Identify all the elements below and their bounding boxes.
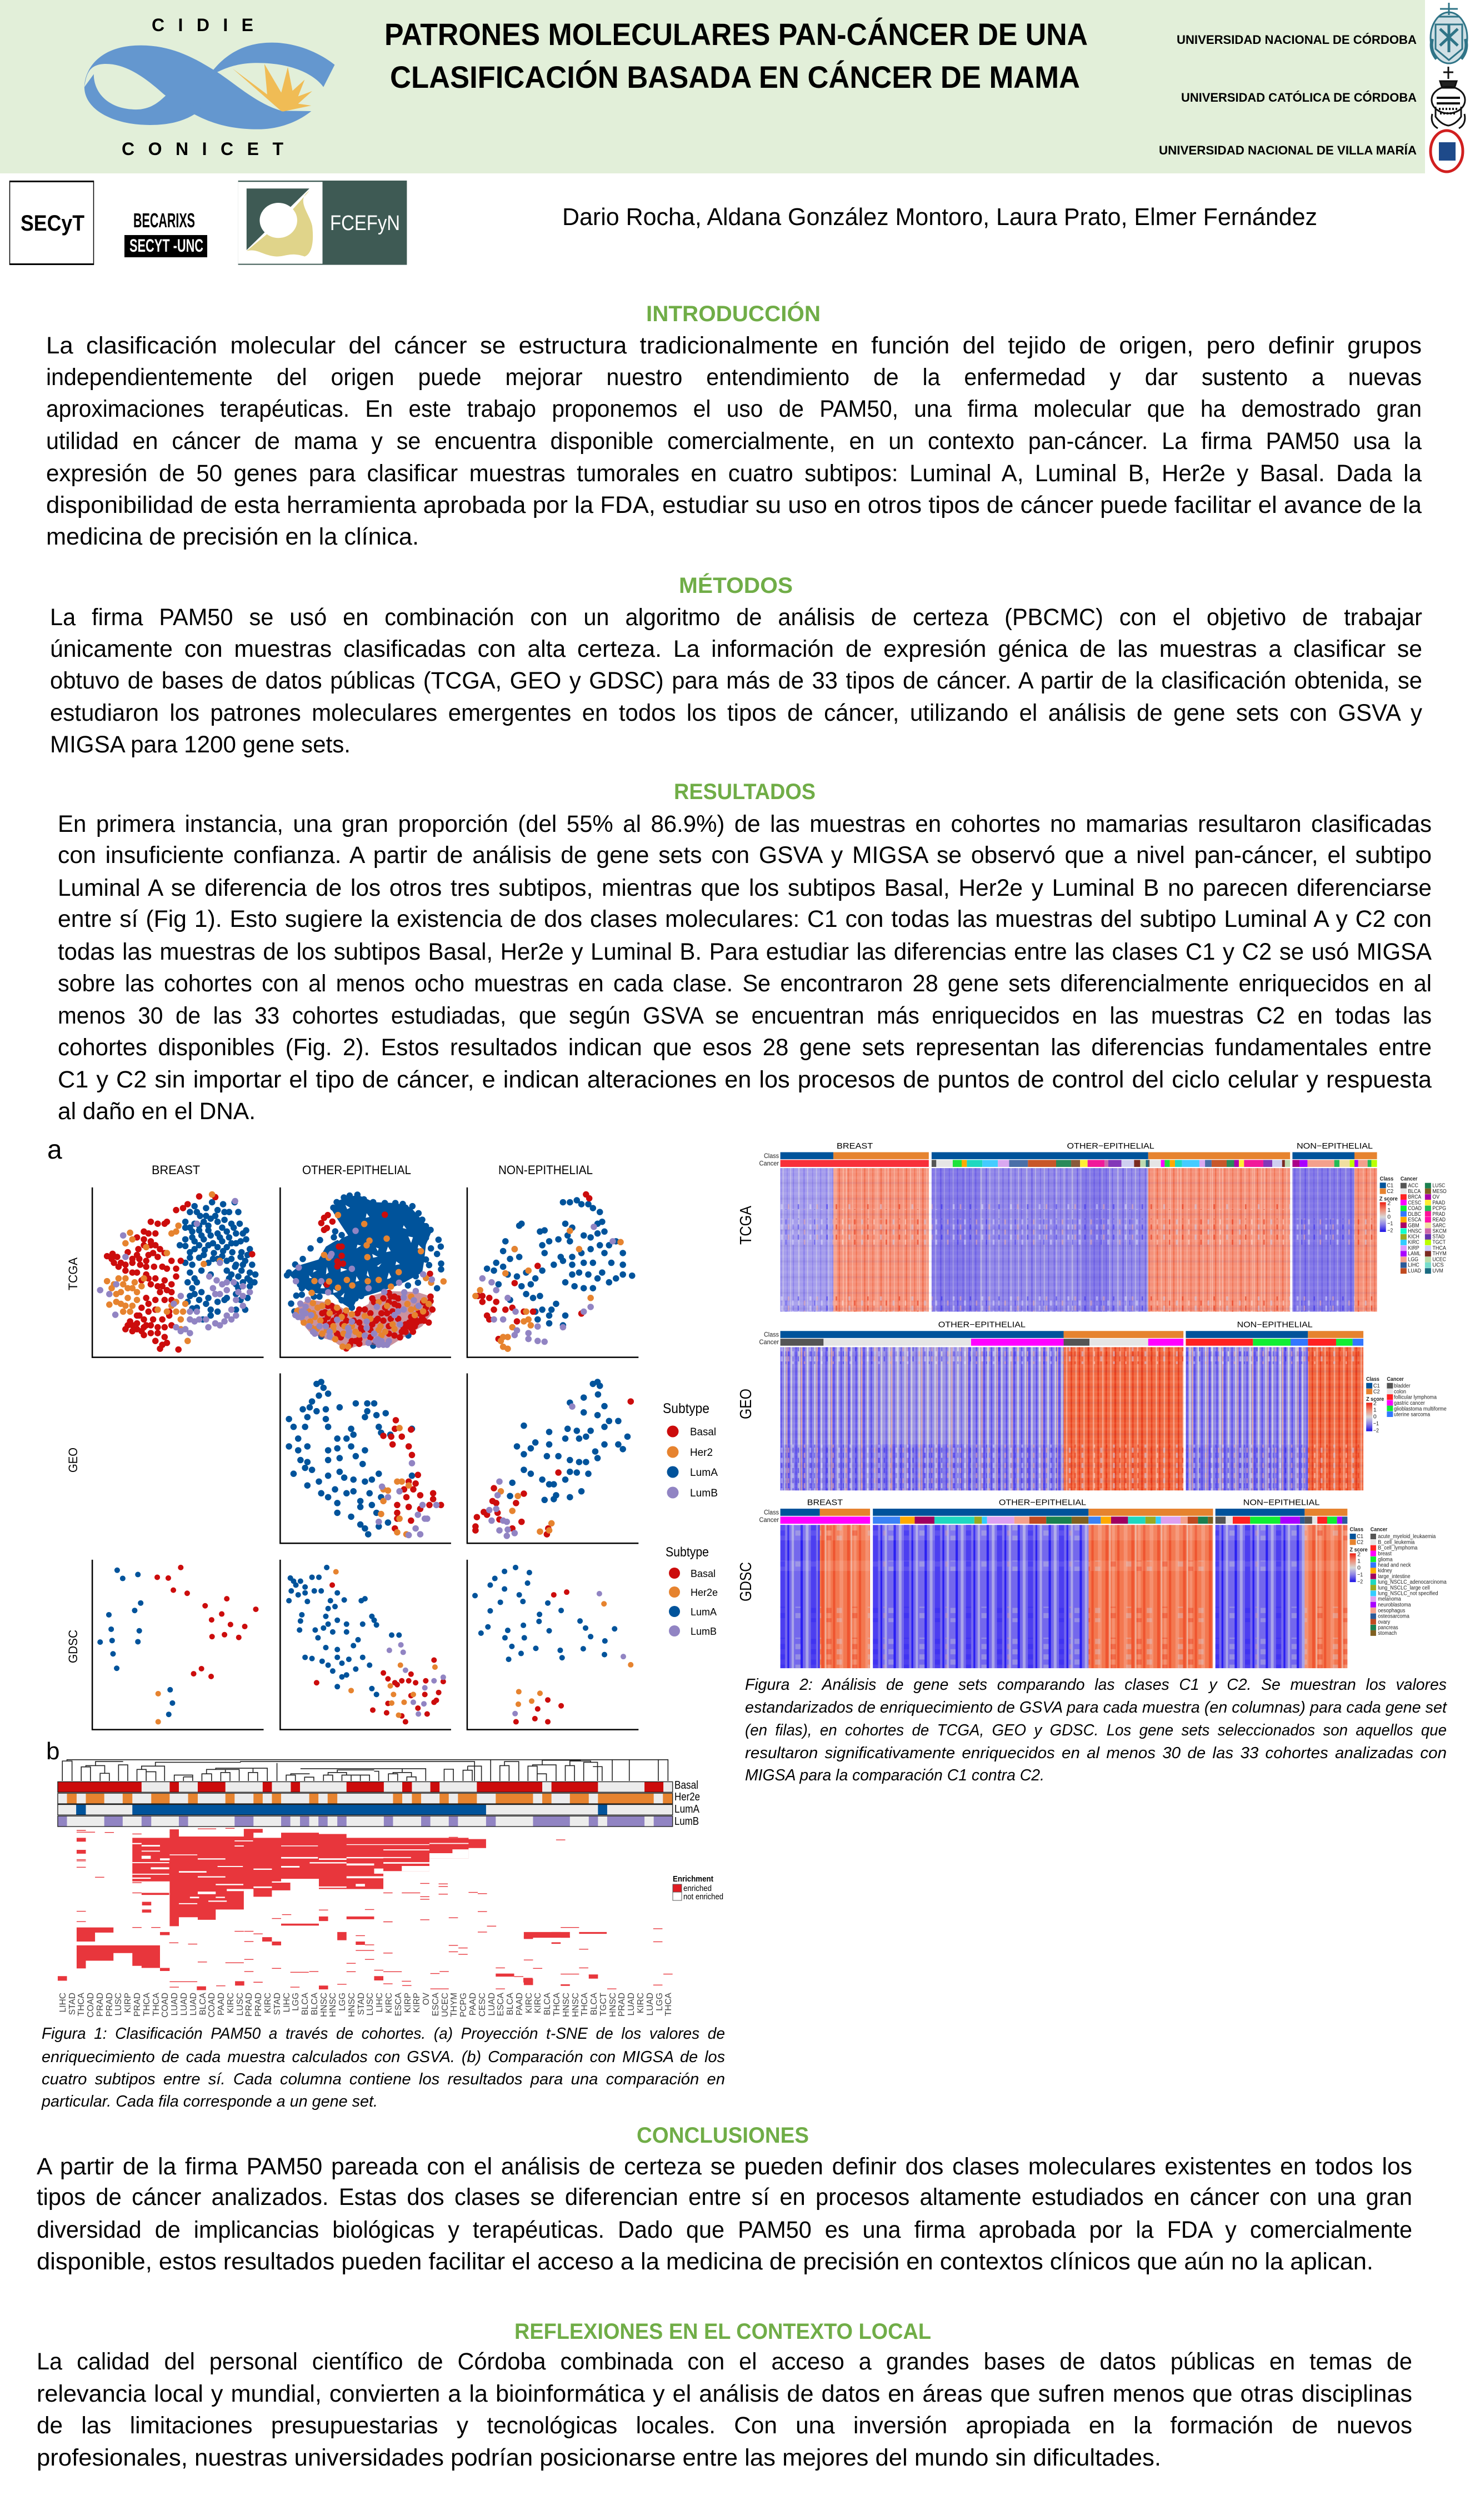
TCGA legend: C1: [1387, 1182, 1393, 1189]
scatter row labels: GEO: [66, 1448, 80, 1473]
column labels: LGG: [655, 1993, 664, 2011]
column labels: HNSC: [571, 1993, 581, 2017]
text block: introducción: expresión de 50 genes para clasificar muestras tumorales en cuatro subtipos: Luminal A, Luminal B, Her2e y Basal. Dada la: [46, 460, 1422, 487]
GDSC legend: 1: [1357, 1558, 1361, 1564]
text: SARC: [1432, 1222, 1446, 1229]
logo: FCEFyN: FCEFyN: [330, 212, 400, 235]
GDSC legend: ovary: [1378, 1618, 1391, 1625]
column group titles: NON−EPITHELIAL: [1237, 1320, 1313, 1329]
legend: subtype (GEO): LumB: [690, 1488, 718, 1499]
scatter titles: BREAST: [152, 1163, 200, 1177]
column labels: CESC: [478, 1993, 487, 2017]
column labels: LUSC: [366, 1993, 375, 2015]
TCGA legend: 1: [1387, 1207, 1391, 1213]
GDSC legend: C1: [1357, 1533, 1363, 1539]
GDSC legend: pancreas: [1378, 1624, 1398, 1630]
column labels: KIRC: [226, 1993, 236, 2013]
text block: conclusiones: [37, 2153, 1412, 2275]
column labels: LUSC: [236, 1993, 245, 2015]
text block: introducción: disponibilidad de esta herramienta aprobada por la FDA, estudiar su uso en otros tipos de cáncer puede facilitar el avance de la: [46, 492, 1422, 518]
heat cells: [781, 1347, 1363, 1490]
column labels: PRAD: [105, 1993, 114, 2017]
heatmap row labels: [737, 1205, 755, 1601]
authors: Dario Rocha, Aldana González Montoro, Laura Prato, Elmer Fernández: [562, 203, 1317, 231]
column labels: HNSC: [328, 1993, 338, 2017]
TCGA legend: −1: [1387, 1220, 1393, 1227]
TCGA legend: Cancer: [1401, 1175, 1418, 1182]
column group titles: Class: [764, 1331, 779, 1338]
column labels: LUAD: [189, 1993, 198, 2015]
GDSC legend: C2: [1357, 1539, 1363, 1545]
GEO legend: Z score: [1366, 1396, 1384, 1402]
TCGA legend: CESC: [1408, 1199, 1421, 1206]
column labels: LGG: [291, 1993, 301, 2011]
TCGA legend: HNSC: [1408, 1227, 1422, 1234]
icon: UNC crest: [1431, 3, 1467, 63]
annotation row labels: LumB: [674, 1815, 699, 1828]
panel label: b: b: [46, 1738, 59, 1765]
text block: conclusiones: A partir de la firma PAM50 pareada con el análisis de certeza se pueden definir dos clases moleculares existentes en todos los: [37, 2153, 1412, 2180]
dendrogram: [62, 1760, 668, 1781]
legend: subtype (GDSC): [666, 1545, 718, 1637]
heatmap row labels: GEO: [737, 1389, 755, 1419]
TCGA legend: LAML: [1408, 1250, 1421, 1257]
heatmap row labels: GDSC: [737, 1562, 755, 1601]
column labels: TGCT: [599, 1992, 608, 2016]
column labels: LUAD: [627, 1993, 636, 2015]
annotation row labels: Basal: [674, 1779, 698, 1792]
column labels: THCA: [142, 1992, 152, 2016]
scatter row labels: [66, 1257, 80, 1663]
MIGSA enrichment heatmap: [58, 1760, 673, 1990]
column labels: PAAD: [468, 1993, 478, 2015]
column labels: ESCA: [394, 1992, 403, 2016]
column group titles: NON−EPITHELIAL: [1297, 1141, 1373, 1150]
column labels: COAD: [86, 1993, 96, 2018]
text block: resultados: C1 y C2 sin importar el tipo de cáncer, e indican alteraciones en los procesos de puntos de control del ciclo celular y respuesta: [58, 1066, 1432, 1093]
panel label: a: a: [47, 1135, 62, 1165]
title: CLASIFICACIÓN BASADA EN CÁNCER DE MAMA: [390, 59, 1080, 94]
column labels: KIRP: [403, 1993, 413, 2013]
column labels: BLCA: [310, 1992, 319, 2015]
column labels: LIHC: [282, 1993, 292, 2012]
GEO legend: 2: [1373, 1400, 1377, 1406]
heatmap: GDSC: [759, 1498, 1447, 1668]
TCGA legend: ESCA: [1408, 1216, 1421, 1222]
legend: subtype (GEO): Basal: [690, 1426, 716, 1438]
heat cells: [781, 1525, 1347, 1668]
legend: subtype (GDSC): Subtype: [666, 1545, 709, 1560]
heatmap: GDSC: NON−EPITHELIAL: [1243, 1498, 1319, 1507]
text block: resultados: al daño en el DNA.: [58, 1098, 256, 1125]
text: PAAD: [1432, 1199, 1445, 1206]
TCGA legend: LUAD: [1408, 1268, 1421, 1274]
TCGA legend: 2: [1387, 1200, 1391, 1206]
scatter: GEO other-epithelial: [289, 1382, 441, 1535]
university names: [1159, 33, 1417, 157]
column labels: BLCA: [589, 1992, 599, 2015]
column group titles: Cancer: [759, 1159, 779, 1167]
text: LUSC: [1432, 1182, 1445, 1189]
column labels: [58, 1992, 673, 2018]
column labels: PAAD: [217, 1993, 226, 2015]
logo: SECyT: [9, 181, 94, 265]
title: PATRONES MOLECULARES PAN-CÁNCER DE UNA: [384, 17, 1088, 52]
column labels: PCPG: [459, 1993, 468, 2017]
logo: Becarixs SECyT-UNC: BECARIXS: [133, 209, 195, 232]
figure 1 caption: particular. Cada fila corresponde a un gene set.: [41, 2093, 378, 2110]
heat cells: [781, 1168, 1377, 1311]
column group titles: Cancer: [759, 1516, 779, 1524]
GDSC legend: large_intestine: [1378, 1573, 1411, 1580]
text block: métodos: La firma PAM50 se usó en combinación con un algoritmo de análisis de certeza (PBCMC) con el objetivo de trabajar: [50, 604, 1422, 631]
scatter: TCGA non-epithelial: [476, 1195, 632, 1349]
column group titles: OTHER−EPITHELIAL: [1067, 1141, 1154, 1150]
text: PRAD: [1432, 1211, 1445, 1217]
class bars: [781, 1331, 1308, 1338]
column labels: BLCA: [198, 1992, 208, 2015]
legend: subtype (GEO): [663, 1401, 718, 1499]
university names: UNIVERSIDAD NACIONAL DE CÓRDOBA: [1177, 33, 1417, 47]
university names: UNIVERSIDAD CATÓLICA DE CÓRDOBA: [1181, 91, 1417, 104]
class bars: [781, 1152, 1354, 1159]
heading: resultados: RESULTADOS: [674, 780, 816, 804]
GEO legend: [1366, 1376, 1447, 1434]
text block: conclusiones: disponible, estos resultados pueden facilitar el acceso a la medicina de precisión en contextos clínicos que aún no la aplican.: [37, 2248, 1373, 2275]
TCGA legend: UCS: [1432, 1262, 1444, 1268]
heatmap: GEO: [759, 1320, 1447, 1490]
column labels: STAD: [357, 1993, 366, 2015]
text block: resultados: todas las muestras de los subtipos Basal, Her2e y Luminal B. Para estudiar las diferencias entre las clases C1 y C2 se usó MIGSA: [58, 939, 1432, 965]
figure 1 caption: cuatro subtipos entre sí. Cada columna contiene los resultados para una comparación en: [42, 2070, 725, 2088]
GDSC legend: neuroblastoma: [1378, 1601, 1411, 1608]
column group titles: [759, 1141, 1373, 1167]
GEO legend: 1: [1373, 1406, 1377, 1413]
GDSC legend: 0: [1357, 1564, 1361, 1570]
column labels: LIHC: [58, 1993, 68, 2012]
column group titles: BREAST: [807, 1498, 843, 1507]
GDSC legend: Class: [1350, 1526, 1363, 1533]
TCGA legend: GBM: [1408, 1222, 1419, 1229]
cancer bar: [781, 1160, 1377, 1167]
column labels: PRAD: [244, 1993, 254, 2017]
column labels: LUAD: [179, 1993, 189, 2015]
logo: FCEFyN: [238, 181, 407, 265]
text block: reflexiones: relevancia local y mundial, convierten a la bioinformática y el análisis de datos en áreas que sufren menos que otras disciplinas: [37, 2381, 1412, 2407]
legend: subtype (GEO): Her2: [690, 1447, 713, 1459]
GEO legend: C2: [1373, 1388, 1380, 1395]
text block: resultados: [58, 811, 1432, 1125]
column labels: BLCA: [301, 1992, 310, 2015]
legend: enrichment: Enrichment: [673, 1874, 713, 1884]
column labels: HNSC: [608, 1993, 618, 2017]
scatter plot grid: [92, 1187, 638, 1730]
TCGA legend: C2: [1387, 1188, 1393, 1195]
column labels: UCEC: [441, 1993, 450, 2017]
logo: Becarixs SECyT-UNC: SECYT -UNC: [129, 236, 203, 256]
TCGA legend: COAD: [1408, 1205, 1422, 1211]
column labels: HNSC: [347, 1993, 357, 2017]
legend: enrichment: [673, 1874, 723, 1902]
text block: reflexiones: La calidad del personal científico de Córdoba combinada con el acceso a grandes bases de datos públicas en temas de: [37, 2348, 1412, 2375]
text: THYM: [1432, 1250, 1447, 1257]
GDSC legend: kidney: [1378, 1567, 1392, 1574]
GEO legend: 0: [1373, 1414, 1377, 1420]
column group titles: BREAST: [837, 1141, 873, 1150]
column labels: HNSC: [562, 1993, 571, 2017]
scatter: GEO non-epithelial: [476, 1382, 631, 1536]
column labels: STAD: [68, 1993, 77, 2015]
GDSC legend: −1: [1357, 1571, 1363, 1578]
legend: subtype (GDSC): LumB: [691, 1626, 717, 1637]
GDSC legend: Cancer: [1371, 1526, 1388, 1533]
TCGA legend: LIHC: [1408, 1262, 1419, 1268]
text block: conclusiones: tipos de cáncer analizados. Estas dos clases se diferencian entre sí en procesos altamente estudiados en cáncer con una gran: [37, 2184, 1412, 2210]
column labels: LUSC: [114, 1993, 123, 2015]
logo label: CIDIE: CIDIE: [152, 15, 253, 35]
GDSC legend: breast: [1378, 1550, 1392, 1556]
text block: resultados: Luminal A se diferencia de los otros tres subtipos, mientras que los subtipos Basal, Her2e y Luminal B no parecen diferenciarse: [58, 875, 1432, 901]
column labels: LUAD: [170, 1993, 179, 2015]
GEO legend: bladder: [1394, 1383, 1411, 1389]
GDSC legend: −2: [1357, 1578, 1363, 1584]
figure 1 caption: [41, 2025, 725, 2110]
legend: subtype (GDSC): Basal: [691, 1568, 716, 1579]
legend: enrichment: not enriched: [683, 1892, 723, 1902]
column labels: PRAD: [617, 1993, 627, 2017]
legend: subtype (GEO): Subtype: [663, 1401, 709, 1416]
text block: resultados: En primera instancia, una gran proporción (del 55% al 86.9%) de las muestras en cohortes no mamarias resultaron clasificadas: [58, 811, 1432, 837]
annotation row labels: LumA: [674, 1803, 700, 1815]
TCGA legend: KIRP: [1408, 1245, 1419, 1251]
column group titles: Class: [764, 1152, 779, 1160]
scatter: TCGA breast: [100, 1195, 256, 1350]
text block: introducción: La clasificación molecular del cáncer se estructura tradicionalmente en función del tejido de origen, pero definir grupos: [46, 332, 1422, 359]
text block: resultados: cohortes disponibles (Fig. 2). Estos resultados indican que esos 28 gene sets representan las diferencias fundamentales entre: [58, 1034, 1432, 1061]
figure 2 caption: Figura 2: Análisis de gene sets comparando las clases C1 y C2. Se muestran los valores: [745, 1676, 1447, 1694]
GEO legend: −1: [1373, 1420, 1379, 1427]
heatmap row labels: TCGA: [737, 1205, 755, 1245]
icon: infinity ribbon with sun: [84, 43, 334, 129]
TCGA legend: KIRC: [1408, 1239, 1419, 1245]
TCGA legend: [1379, 1175, 1447, 1274]
column group titles: [759, 1498, 1319, 1524]
TCGA legend: Class: [1380, 1175, 1393, 1182]
column labels: PRAD: [254, 1993, 263, 2017]
text block: conclusiones: diversidad de implicancias biológicas y terapéuticas. Dado que PAM50 es una firma aprobada por la FDA y comercialmente: [37, 2217, 1412, 2243]
column labels: ESCA: [431, 1992, 441, 2016]
column labels: THCA: [152, 1992, 161, 2016]
GDSC legend: oesophagus: [1378, 1607, 1405, 1614]
column labels: PAAD: [515, 1993, 524, 2015]
text block: resultados: sobre las cohortes con al menos ocho muestras en cada clase. Se encontraron 28 gene sets diferencialmente enriquecidos en al: [58, 970, 1432, 997]
axes: [92, 1187, 638, 1730]
column group titles: Class: [764, 1508, 779, 1516]
scatter row labels: GDSC: [66, 1630, 80, 1663]
GEO legend: −2: [1373, 1427, 1379, 1434]
GDSC legend: osteosarcoma: [1378, 1613, 1409, 1619]
text: MESO: [1432, 1188, 1447, 1195]
GDSC legend: melanoma: [1378, 1595, 1401, 1602]
TCGA legend: DLBC: [1408, 1211, 1421, 1217]
TCGA legend: LGG: [1408, 1256, 1418, 1263]
scatter: GDSC non-epithelial: [475, 1568, 631, 1722]
column labels: PRAD: [133, 1993, 142, 2017]
figure 2 caption: (en filas), en cohortes de TCGA, GEO y GDSC. Los gene sets seleccionados son aquellos que: [745, 1721, 1447, 1739]
column labels: KIRP: [123, 1993, 133, 2013]
text block: métodos: [50, 604, 1422, 758]
column group titles: OTHER−EPITHELIAL: [999, 1498, 1086, 1507]
TCGA legend: KICH: [1408, 1234, 1419, 1240]
scatter titles: OTHER-EPITHELIAL: [302, 1163, 411, 1177]
class bars: [781, 1509, 1304, 1516]
scatter: GDSC other-epithelial: [289, 1568, 443, 1722]
annotation bars: [58, 1782, 673, 1827]
column labels: LUAD: [646, 1993, 655, 2015]
legend: subtype (GEO): LumA: [690, 1467, 718, 1479]
icon: UNVM seal: [1431, 131, 1463, 172]
scatter titles: [152, 1163, 593, 1177]
column labels: OV: [422, 1992, 431, 2005]
TCGA legend: OV: [1432, 1194, 1439, 1200]
column labels: KIRC: [533, 1993, 543, 2013]
text block: reflexiones: [37, 2348, 1412, 2471]
column labels: BLCA: [543, 1992, 552, 2015]
TCGA legend: 0: [1387, 1214, 1391, 1220]
logo: SECyT: SECyT: [21, 211, 84, 236]
text block: resultados: con insuficiente confianza. A partir de análisis de gene sets con GSVA y MIGSA se observó que a nivel pan-cáncer, el subtipo: [58, 842, 1432, 869]
text: THCA: [1432, 1245, 1446, 1251]
column labels: LIHC: [375, 1993, 384, 2012]
text: UCEC: [1432, 1256, 1446, 1263]
legend: subtype (GDSC): Her2e: [691, 1587, 718, 1598]
CIDIE CONICET logo: [84, 15, 334, 159]
column labels: KIRC: [263, 1993, 273, 2013]
figure 1 caption: Figura 1: Clasificación PAM50 a través de cohortes. (a) Proyección t-SNE de los valores de: [42, 2025, 725, 2043]
figure 1 caption: enriquecimiento de cada muestra calculados con GSVA. (b) Comparación con MIGSA de los: [42, 2048, 725, 2066]
logo: Becarixs SECyT-UNC: [124, 209, 207, 257]
column labels: KIRC: [524, 1993, 534, 2013]
GDSC legend: head and neck: [1378, 1561, 1411, 1568]
column labels: STAD: [273, 1993, 282, 2015]
text: SKCM: [1432, 1227, 1447, 1234]
column labels: LUAD: [487, 1993, 497, 2015]
heading: métodos: MÉTODOS: [679, 573, 793, 598]
scatter row labels: TCGA: [66, 1257, 80, 1290]
annotation row labels: Her2e: [674, 1791, 700, 1803]
GDSC legend: stomach: [1378, 1630, 1397, 1636]
icon: UCC crest: [1432, 67, 1465, 128]
text: TGCT: [1432, 1239, 1446, 1245]
text block: introducción: [46, 332, 1422, 550]
column labels: PRAD: [96, 1993, 105, 2017]
column labels: ESCA: [496, 1992, 506, 2016]
column labels: THCA: [580, 1992, 589, 2016]
column labels: THCA: [77, 1992, 86, 2016]
column labels: BLCA: [506, 1992, 515, 2015]
heading: conclusiones: CONCLUSIONES: [637, 2123, 809, 2148]
column labels: KIRC: [636, 1993, 646, 2013]
logo label: CONICET: CONICET: [122, 139, 283, 159]
text block: reflexiones: profesionales, nuestras universidades podrían posicionarse entre las mejores del mundo sin dificultades.: [37, 2444, 1161, 2471]
text block: métodos: únicamente con muestras clasificadas con alta certeza. La información de expresión génica de las muestras a clasificar se: [50, 636, 1422, 662]
university names: UNIVERSIDAD NACIONAL DE VILLA MARÍA: [1159, 143, 1417, 157]
column labels: KIRC: [384, 1993, 394, 2013]
GEO legend: Class: [1366, 1376, 1379, 1382]
GDSC legend: Z score: [1350, 1546, 1368, 1553]
column labels: THCA: [552, 1992, 562, 2016]
text block: introducción: utilidad en cáncer de mama y se encuentra disponible comercialmente, en un contexto pan-cáncer. La firma PAM50 usa la: [46, 428, 1422, 455]
heading: introducción: INTRODUCCIÓN: [646, 301, 821, 326]
heatmap: TCGA: [759, 1141, 1447, 1311]
figure 2 caption: resultaron significativamente enriquecidos en al menos 30 de las 33 cohortes analizadas con: [745, 1744, 1447, 1762]
column labels: HNSC: [319, 1993, 329, 2017]
text block: resultados: entre sí (Fig 1). Esto sugiere la existencia de dos clases moleculares: C1 con todas las muestras del subtipo Luminal A y C2 con: [58, 906, 1432, 932]
GDSC legend: glioma: [1378, 1556, 1393, 1562]
column labels: COAD: [207, 1993, 217, 2018]
GEO legend: Cancer: [1387, 1376, 1404, 1382]
column group titles: OTHER−EPITHELIAL: [938, 1320, 1026, 1329]
GDSC legend: [1350, 1526, 1447, 1636]
GEO legend: colon: [1394, 1388, 1406, 1395]
heading: reflexiones: REFLEXIONES EN EL CONTEXTO LOCAL: [514, 2319, 931, 2344]
TCGA legend: Z score: [1379, 1195, 1398, 1202]
text: READ: [1432, 1216, 1446, 1222]
text block: métodos: obtuvo de bases de datos públicas (TCGA, GEO y GDSC) para más de 33 tipos de cáncer. A partir de la clasificación obtenida, se: [50, 667, 1422, 694]
column group titles: Cancer: [759, 1338, 779, 1346]
figure 2 caption: MIGSA para la comparación C1 contra C2.: [745, 1767, 1044, 1784]
TCGA legend: −2: [1387, 1227, 1393, 1234]
GEO legend: C1: [1373, 1383, 1380, 1389]
column group titles: [759, 1320, 1313, 1346]
enrichment matrix: [58, 1828, 673, 1990]
column labels: LGG: [338, 1993, 347, 2011]
text block: introducción: independientemente del origen puede mejorar nuestro entendimiento de la enfermedad y dar sustento a nuevas: [46, 364, 1422, 391]
text block: reflexiones: de las limitaciones presupuestarias y tecnológicas locales. Con una inversión apropiada en la formación de nuevos: [37, 2412, 1412, 2439]
scatter: GDSC breast: [100, 1568, 256, 1722]
figure 2 caption: [745, 1676, 1448, 1784]
text block: introducción: medicina de precisión en la clínica.: [46, 523, 419, 550]
legend: enrichment: enriched: [683, 1884, 712, 1893]
annotation row labels: [674, 1779, 700, 1828]
title: [384, 17, 1088, 94]
cancer bar: [781, 1516, 1347, 1524]
TCGA legend: BRCA: [1408, 1194, 1421, 1200]
TCGA legend: ACC: [1408, 1182, 1418, 1189]
GDSC legend: 2: [1357, 1551, 1361, 1558]
header band: [0, 0, 1425, 173]
text block: métodos: estudiaron los patrones moleculares emergentes en todos los tipos de cáncer, utilizando el análisis de gene sets con GSVA y: [50, 700, 1422, 726]
scatter: TCGA other-epithelial: [287, 1195, 443, 1350]
column labels: COAD: [161, 1993, 170, 2018]
scatter titles: NON-EPITHELIAL: [498, 1163, 593, 1177]
column labels: THCA: [664, 1992, 673, 2016]
text: STAD: [1432, 1234, 1444, 1240]
column labels: KIRP: [412, 1993, 422, 2013]
cancer bar: [781, 1339, 1363, 1346]
text block: métodos: MIGSA para 1200 gene sets.: [50, 731, 351, 758]
column labels: THYM: [449, 1993, 459, 2017]
TCGA legend: UVM: [1432, 1268, 1443, 1274]
figure 2 caption: estandarizados de enriquecimiento de GSVA para cada muestra (en columnas) para cada gene set: [745, 1699, 1448, 1716]
text: PCPG: [1432, 1205, 1446, 1211]
legend: subtype (GDSC): LumA: [691, 1606, 717, 1618]
text block: introducción: aproximaciones terapéuticas. En este trabajo proponemos el uso de PAM50, una firma molecular que ha demostrado gran: [46, 396, 1422, 422]
TCGA legend: BLCA: [1408, 1188, 1421, 1195]
GEO legend: gastric cancer: [1394, 1400, 1425, 1406]
